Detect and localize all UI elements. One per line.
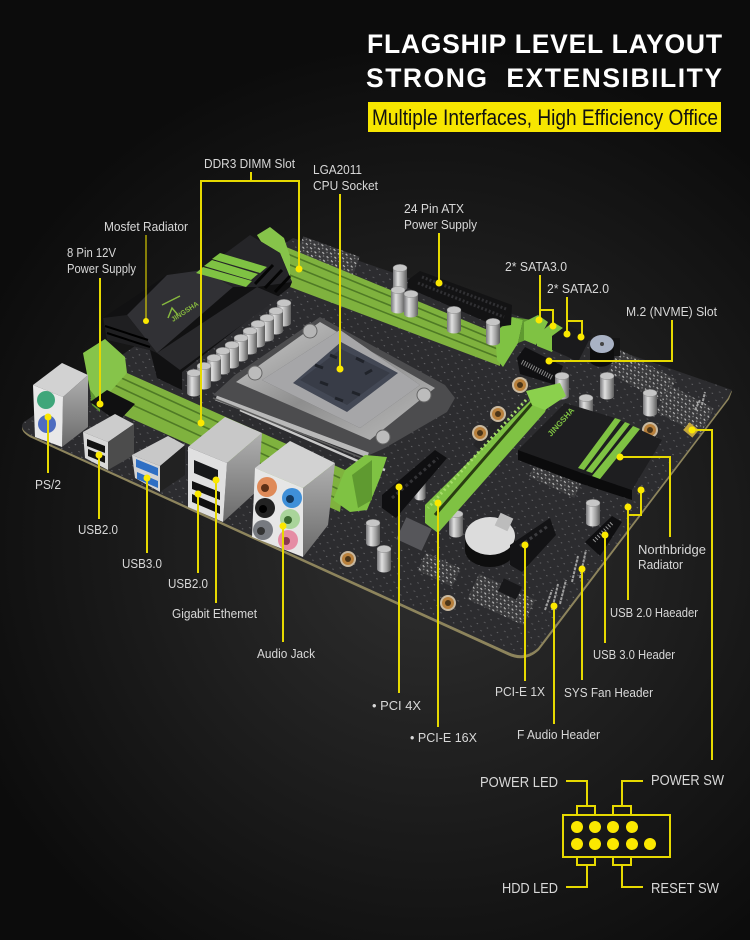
pin header box <box>563 815 670 857</box>
label: PCI-E 16X <box>410 500 477 745</box>
label: USB 3.0 Header <box>593 532 676 662</box>
POWER LED callout: POWER LED <box>480 775 558 791</box>
DIMM slots left group <box>83 339 387 512</box>
title: STRONG EXTENSIBILITY <box>366 63 722 93</box>
SATA ports green and black <box>524 315 592 362</box>
HDD LED callout <box>502 857 595 897</box>
buzzer <box>590 335 620 367</box>
USB 2.0 port <box>83 414 134 470</box>
USB 3.0 header <box>585 516 622 556</box>
label: USB2.0 stack: USB2.0 <box>168 576 208 591</box>
label: F Audio Header: F Audio Header <box>517 727 601 742</box>
label: DDR3 DIMM Slot <box>198 156 302 426</box>
radiator silhouette <box>103 235 292 390</box>
left plane <box>103 315 157 353</box>
label: PCI 4X: • PCI 4X <box>372 698 421 713</box>
label: Gigabit Ethemet <box>172 476 257 621</box>
8 pin connector <box>90 390 135 422</box>
label: LGA2011 CPU Socket: CPU Socket <box>313 178 378 193</box>
silkscreen component clusters <box>296 236 714 625</box>
label: 8 Pin 12V Power Supply <box>67 245 136 408</box>
logo <box>162 296 200 324</box>
label: PCI-E 16X: • PCI-E 16X <box>410 730 477 745</box>
audio jack stack <box>252 441 335 557</box>
sloped plane <box>157 287 280 370</box>
label: 24 Pin ATX Power Supply <box>404 201 477 286</box>
label: PS/2 <box>35 414 61 492</box>
pins <box>571 821 656 850</box>
label: Mosfet Radiator: Mosfet Radiator <box>104 219 189 234</box>
Northbridge radiator: JINGSHA <box>546 406 576 438</box>
label: PCI 4X <box>372 484 421 713</box>
Mosfet capacitors row <box>187 299 291 396</box>
label: 2* SATA2.0: 2* SATA2.0 <box>547 281 609 296</box>
label: Northbridge Radiator: Northbridge <box>638 542 706 557</box>
CPU socket <box>213 317 455 470</box>
POWER SW callout <box>613 773 724 815</box>
Mosfet radiator <box>103 235 292 390</box>
logo: JINGSHA <box>170 301 200 324</box>
label: SYS Fan Header: SYS Fan Header <box>564 685 654 700</box>
end fins <box>105 326 150 347</box>
retention frame <box>236 322 435 440</box>
label: USB3.0: USB3.0 <box>122 556 162 571</box>
socket base <box>213 317 455 456</box>
board PCB <box>22 238 732 658</box>
DIMM slots top group <box>257 227 532 367</box>
gigabit LAN and USB 2.0 stack <box>188 417 262 522</box>
label: Audio Jack: Audio Jack <box>257 646 315 661</box>
label: Gigabit Ethemet: Gigabit Ethemet <box>172 606 257 621</box>
label: LGA2011 CPU Socket <box>313 162 378 372</box>
label: LGA2011 CPU Socket: LGA2011 <box>313 162 362 177</box>
POWER LED callout <box>480 775 595 815</box>
label: USB2.0 stack <box>168 490 208 591</box>
levers and screws <box>303 324 317 338</box>
PS/2 port <box>33 363 88 447</box>
24 pin ATX connector <box>408 271 512 327</box>
head block <box>203 235 292 287</box>
PCI-E 16X slot <box>425 383 566 533</box>
label: M.2 (NVME) Slot <box>546 304 717 364</box>
label: 2* SATA3.0: 2* SATA3.0 <box>505 259 567 274</box>
motherboard <box>22 227 732 658</box>
socket lid <box>293 342 398 412</box>
label: Mosfet Radiator <box>104 219 189 324</box>
POWER SW callout: POWER SW <box>651 773 724 789</box>
label: PCI-E 1X <box>495 542 545 699</box>
Northbridge radiator <box>518 403 662 500</box>
CMOS battery <box>465 513 515 567</box>
label: 24 Pin ATX Power Supply: Power Supply <box>404 217 477 232</box>
label: Northbridge Radiator <box>616 454 706 572</box>
label: USB3.0 <box>122 474 162 571</box>
RESET SW callout: RESET SW <box>651 881 719 897</box>
title: FLAGSHIP LEVEL LAYOUT <box>367 29 722 59</box>
label: PCI-E 1X: PCI-E 1X <box>495 684 545 699</box>
RESET SW callout <box>613 857 719 897</box>
label: 8 Pin 12V Power Supply: 8 Pin 12V <box>67 245 116 260</box>
label: F Audio Header <box>517 602 601 742</box>
leader to front panel pinout <box>688 426 712 760</box>
top plane <box>127 270 233 353</box>
label: USB 2.0 Haeader <box>610 486 699 620</box>
label: 8 Pin 12V Power Supply: Power Supply <box>67 261 136 276</box>
label: PS/2: PS/2 <box>35 477 61 492</box>
label: USB2.0: USB2.0 <box>78 522 118 537</box>
board capacitors <box>340 372 658 611</box>
M.2 slot <box>517 347 563 385</box>
label: SYS Fan Header <box>564 566 654 700</box>
pin headers <box>545 392 705 610</box>
label: 24 Pin ATX Power Supply: 24 Pin ATX <box>404 201 464 216</box>
label: Northbridge Radiator: Radiator <box>638 557 684 572</box>
front panel pins <box>683 422 699 438</box>
label: M.2 (NVME) Slot: M.2 (NVME) Slot <box>626 304 717 319</box>
label: USB2.0 <box>78 452 118 537</box>
PCI-E 1X slot <box>510 518 556 572</box>
label: 2* SATA2.0 <box>547 281 609 340</box>
PCI 4X slot <box>382 450 447 518</box>
label: DDR3 DIMM Slot: DDR3 DIMM Slot <box>204 156 295 171</box>
USB 3.0 port <box>132 436 185 492</box>
label: USB 2.0 Haeader: USB 2.0 Haeader <box>610 605 699 620</box>
label: Audio Jack <box>257 522 315 661</box>
title <box>366 29 722 93</box>
HDD LED callout: HDD LED <box>502 881 558 897</box>
capacitors near ATX <box>391 264 500 346</box>
label: 2* SATA3.0 <box>505 259 567 330</box>
label: USB 3.0 Header: USB 3.0 Header <box>593 647 676 662</box>
front panel pin diagram <box>480 773 724 897</box>
